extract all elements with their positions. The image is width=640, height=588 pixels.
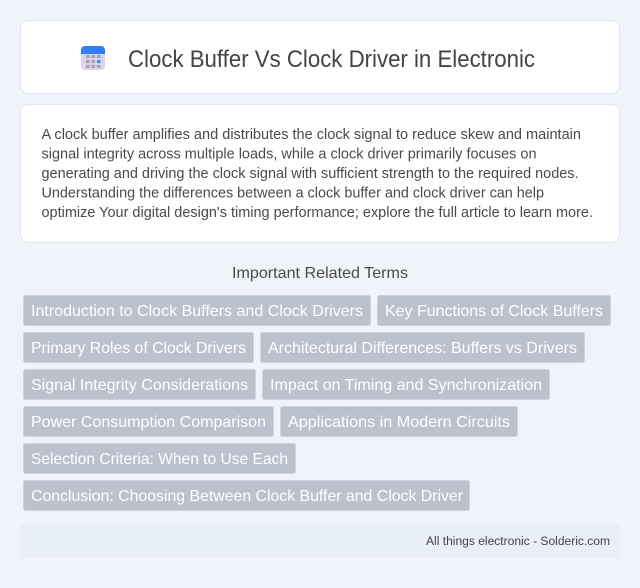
tag: key functions — [378, 296, 610, 326]
tag: power consumption: Power Consumption Comparison — [31, 414, 266, 431]
tag: selection criteria — [24, 444, 296, 474]
tag: selection criteria: Selection Criteria: When to Use Each — [31, 451, 288, 468]
tag: impact on timing — [262, 370, 550, 400]
text block: summary paragraph: A clock buffer amplifies and distributes the clock signal to reduce skew and maintain — [42, 127, 581, 143]
footer — [20, 524, 620, 558]
tag list: related terms — [24, 296, 610, 510]
text block: summary paragraph: signal integrity across multiple loads, while a clock driver primarily focuses on — [42, 146, 536, 162]
tag: applications: Applications in Modern Circuits — [288, 414, 510, 431]
tag: introduction: Introduction to Clock Buffers and Clock Drivers — [31, 303, 363, 320]
tag: applications — [280, 406, 518, 436]
icon: calendar — [81, 46, 105, 70]
panel: summary — [20, 104, 620, 242]
tag: impact on timing: Impact on Timing and Synchronization — [270, 377, 542, 394]
footer: All things electronic - Solderic.com — [426, 534, 610, 548]
tag: architectural differences — [260, 332, 584, 362]
tag: power consumption — [24, 406, 274, 436]
tag: introduction — [24, 296, 370, 326]
tag: signal integrity: Signal Integrity Considerations — [31, 377, 248, 394]
title: Clock Buffer Vs Clock Driver in Electronic — [128, 46, 535, 73]
tag: primary roles: Primary Roles of Clock Drivers — [31, 340, 246, 357]
text block: summary paragraph: generating and driving the clock signal with sufficient strength to the required nodes. — [42, 166, 578, 182]
heading: important related terms: Important Related Terms — [232, 265, 408, 282]
text block: summary paragraph: Understanding the differences between a clock buffer and clock driver can help — [42, 186, 544, 202]
text block: summary paragraph: optimize Your digital design's timing performance; explore the full article to learn more. — [42, 205, 593, 221]
tag: conclusion: Conclusion: Choosing Between Clock Buffer and Clock Driver — [31, 488, 464, 505]
panel: header — [20, 20, 620, 94]
tag: architectural differences: Architectural Differences: Buffers vs Drivers — [268, 340, 577, 357]
tag: signal integrity — [24, 370, 256, 400]
tag: primary roles — [24, 332, 254, 362]
text block: summary paragraph — [42, 127, 593, 221]
tag: key functions: Key Functions of Clock Buffers — [385, 303, 603, 320]
tag: conclusion — [24, 480, 470, 510]
